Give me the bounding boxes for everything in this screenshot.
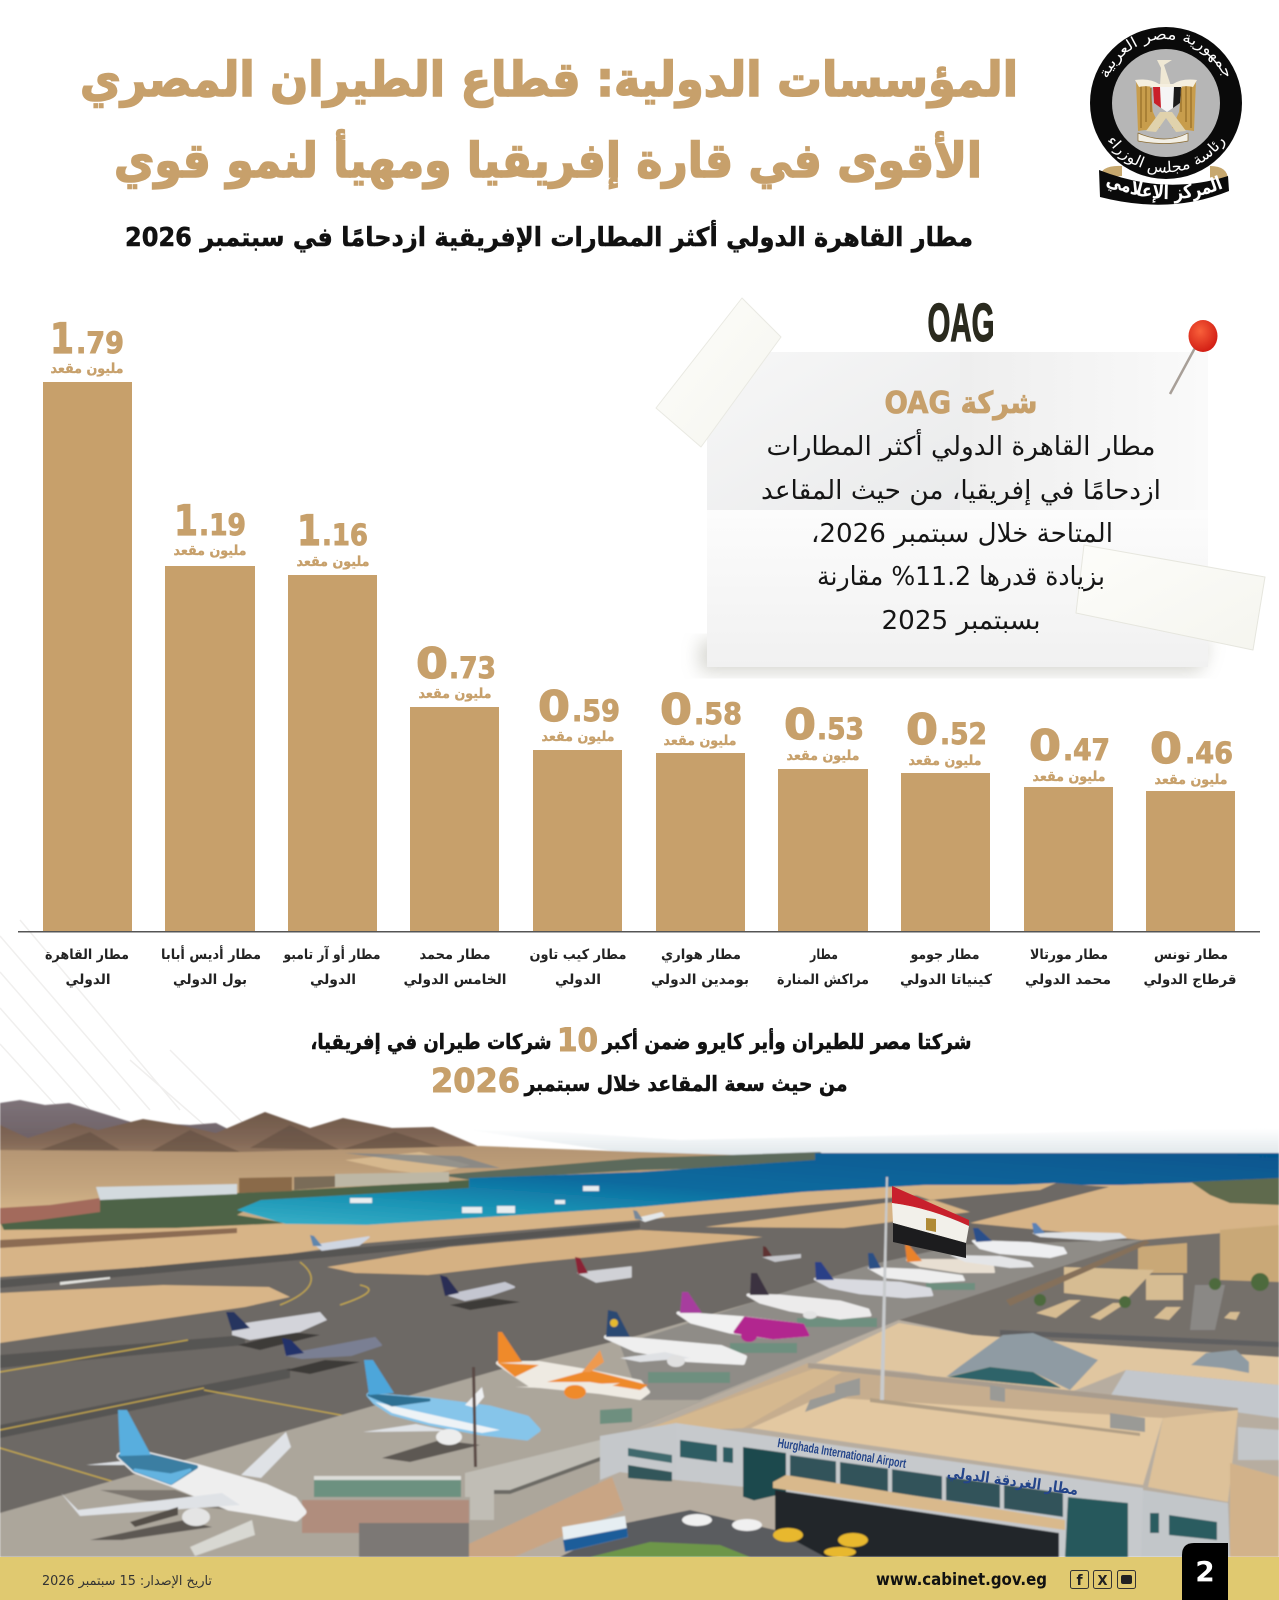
taxi lines [0,1262,369,1487]
paving and bridges [302,1283,975,1557]
aircraft: TUI foreground [61,1410,303,1556]
note heading: شركة OAG [884,386,1038,421]
bar: Jomo Kenyatta 0.52: مليون مقعد [908,753,982,769]
bar: Cape Town 0.59: مليون مقعد [542,729,614,745]
bar: Mohammed V 0.73: مليون مقعد [418,686,492,702]
terminal left wing [600,1423,676,1482]
bar: Cape Town 0.59: الدولي [555,972,601,988]
bar: Tunis Carthage 0.46: قرطاج الدولي [1144,972,1236,988]
asphalt [0,1183,1142,1557]
bar: Jomo Kenyatta 0.52 [900,705,993,988]
bar: Marrakesh Menara 0.53 [777,700,869,988]
bar: Jomo Kenyatta 0.52: .52 [940,717,987,751]
bar: Marrakesh Menara 0.53: 0 [784,700,816,749]
website: www.cabinet.gov.eg [876,1570,1047,1590]
flagpole base line roof [870,1398,1140,1436]
bar: Murtala Muhammed 0.47: مطار مورتالا [1030,947,1108,963]
bar: Jomo Kenyatta 0.52: 0 [906,705,938,754]
bar: Houari Boumediene 0.58: 0 [660,685,692,734]
bar: OR Tambo 1.16 [283,506,380,988]
bar: Tunis Carthage 0.46: .46 [1185,736,1233,770]
terminal rear parapet [640,1363,1238,1433]
bar: Tunis Carthage 0.46: مليون مقعد [1154,772,1228,788]
bar: Addis Ababa 1.19: مطار أديس أبابا [161,945,261,963]
boats [350,1186,599,1213]
eagle emblem [1135,60,1197,144]
text block: Egyptian carriers: شركتا مصر للطيران وأير كايرو ضمن أكبر [602,1027,972,1054]
boundary wall [0,1228,237,1248]
bar: Jomo Kenyatta 0.52: مطار جومو [910,947,980,963]
bar: Houari Boumediene 0.58: مطار هواري [661,947,741,964]
subtitle: مطار القاهرة الدولي أكثر المطارات الإفريقية ازدحامًا في سبتمبر 2026 [125,220,973,253]
bar: OR Tambo 1.16: مطار أو آر تامبو [283,945,380,963]
airport sign: Arabic: مطار الغردقة الدولي [946,1463,1079,1499]
bar: Houari Boumediene 0.58 [651,685,749,988]
bar chart: airports by seats [18,314,1260,988]
dome: small [1191,1350,1249,1373]
aircraft: orange tail stand [905,1245,1034,1272]
title: الأقوى في قارة إفريقيا ومهيأ لنمو قوي [114,129,982,189]
bar: Murtala Muhammed 0.47: .47 [1063,733,1110,767]
bar: Marrakesh Menara 0.53: مراكش المنارة [777,972,869,988]
bar: Murtala Muhammed 0.47: محمد الدولي [1025,972,1111,988]
social icons: X [1097,1574,1108,1589]
panel: OAG note [656,293,1265,672]
bar: OR Tambo 1.16: مليون مقعد [296,554,370,570]
aircraft: far stands [973,1223,1127,1257]
terminal facade [676,1423,1143,1557]
page number tab [1182,1543,1228,1600]
note text: بسبتمبر 2025 [882,606,1040,636]
stand apron [0,1240,1142,1557]
logo: media center emblem [1090,27,1242,205]
note text [761,428,1161,636]
aircraft: Wizz [678,1292,808,1342]
note text: المتاحة خلال سبتمبر 2026، [811,519,1113,549]
text block: Egyptian carriers: من حيث سعة المقاعد خلال سبتمبر [524,1072,848,1096]
bar: Addis Ababa 1.19: مليون مقعد [174,543,246,559]
bar: Cape Town 0.59: .59 [572,694,620,728]
bar: Marrakesh Menara 0.53: مليون مقعد [786,748,860,764]
bar: Tunis Carthage 0.46 [1144,724,1236,988]
bar: Addis Ababa 1.19: .19 [199,508,246,542]
bar: Cairo 1.79: 1 [50,314,74,363]
social icons: f [1076,1573,1083,1589]
photo: Hurghada International Airport [0,1100,1279,1557]
bar: Jomo Kenyatta 0.52: كينياتا الدولي [900,972,993,988]
aircraft: orange [498,1332,648,1399]
ground beneath terminal [560,1228,1279,1557]
logo: media center emblem: رئاسة مجلس الوزراء [1108,138,1226,175]
logo: media center emblem: المركز الإعلامي [1106,175,1222,204]
far town [345,1153,500,1168]
bar: Cape Town 0.59 [530,682,626,988]
aircraft: taxiway group [226,1210,801,1374]
airport sign: English: Hurghada International Airport [777,1435,908,1471]
terminal main roof [751,1397,1163,1485]
note text: ازدحامًا في إفريقيا، من حيث المقاعد [761,476,1161,506]
tape: top left [656,298,781,447]
aircraft: navy tail stand [815,1262,932,1297]
bar: OR Tambo 1.16: الدولي [310,972,356,988]
bar: Cairo 1.79: .79 [76,326,124,360]
bar: Marrakesh Menara 0.53: .53 [817,712,864,746]
bar: Mohammed V 0.73 [404,639,506,988]
right terminal block [1141,1490,1230,1557]
bar: Mohammed V 0.73: 0 [416,639,448,688]
bar: Mohammed V 0.73: الخامس الدولي [404,972,506,988]
icon: red pin [1170,320,1218,394]
sea [237,1153,1279,1225]
resort: left shore [0,1172,469,1230]
issue date: تاريخ الإصدار: 15 سبتمبر 2026 [42,1574,212,1589]
right roof wing [1148,1410,1238,1502]
lamp post [472,1367,477,1467]
aircraft: blue tail stand [868,1253,964,1282]
footer band [0,1543,1279,1600]
text block: Egyptian carriers: 10 [557,1021,598,1059]
bar: Tunis Carthage 0.46: مطار تونس [1154,947,1228,963]
bar: OR Tambo 1.16: 1 [297,506,321,555]
bar: Addis Ababa 1.19 [161,496,261,988]
flag: Egypt [892,1186,969,1258]
text block: Egyptian carriers: شركات طيران في إفريقيا، [310,1030,552,1054]
top roofs [816,1323,1279,1400]
shore vegetation: right [1191,1178,1279,1205]
text block: Egyptian carriers: 2026 [431,1061,520,1100]
forecourt [441,1477,868,1557]
right wall [1111,1370,1279,1418]
bar: Mohammed V 0.73: مطار محمد [420,947,490,963]
page number tab: 2 [1195,1555,1215,1588]
far right block [1238,1427,1279,1460]
bar: Cairo 1.79 [43,314,132,988]
flagpole [880,1177,888,1400]
mountains: back range [0,1100,240,1150]
bar: Murtala Muhammed 0.47: 0 [1029,721,1061,770]
land underlay [0,1156,1279,1330]
bar: Houari Boumediene 0.58: مليون مقعد [664,733,736,749]
bar: Murtala Muhammed 0.47: مليون مقعد [1032,769,1106,785]
mountains: front range [0,1112,520,1160]
bar: Cape Town 0.59: 0 [538,682,570,731]
bar: Addis Ababa 1.19: بول الدولي [173,972,247,988]
bus [562,1516,628,1552]
aircraft: TUI second [363,1360,538,1462]
rooftop plant [805,1378,1145,1432]
tape: lower right [1076,545,1265,650]
bar: Cape Town 0.59: مطار كيب تاون [530,947,626,963]
bar: Cairo 1.79: الدولي [66,972,110,988]
bar: Murtala Muhammed 0.47 [1024,721,1113,988]
bar: Houari Boumediene 0.58: بومدين الدولي [651,972,749,988]
bar: Cairo 1.79: مطار القاهرة [45,947,129,963]
logo: media center emblem: جمهورية مصر العربية [1102,34,1228,78]
dome: main [946,1333,1098,1390]
bar: Tunis Carthage 0.46: 0 [1150,724,1182,773]
title [80,52,1018,189]
sand islands [327,1230,763,1275]
aircraft: Lufthansa [606,1310,745,1367]
bar: Addis Ababa 1.19: 1 [174,496,198,545]
aircraft: striped tail [748,1273,870,1319]
low buildings: right [899,1225,1279,1360]
social icons [1070,1570,1136,1589]
note text: مطار القاهرة الدولي أكثر المطارات [766,428,1156,462]
bar: Marrakesh Menara 0.53: مطار [809,947,838,963]
note text: بزيادة قدرها 11.2% مقارنة [817,562,1105,592]
lower sand [0,1180,1279,1350]
horizon haze [470,1128,1279,1155]
bar: OR Tambo 1.16: .16 [322,518,368,552]
title: المؤسسات الدولية: قطاع الطيران المصري [80,52,1018,108]
desert [0,1146,830,1215]
dark runway bands [0,1222,640,1438]
bar: Mohammed V 0.73: .73 [449,651,496,685]
text block: Egyptian carriers [310,1021,972,1100]
bar: Cairo 1.79: مليون مقعد [50,361,124,377]
logo: OAG: OAG [928,293,994,353]
bar: Houari Boumediene 0.58: .58 [694,697,742,731]
